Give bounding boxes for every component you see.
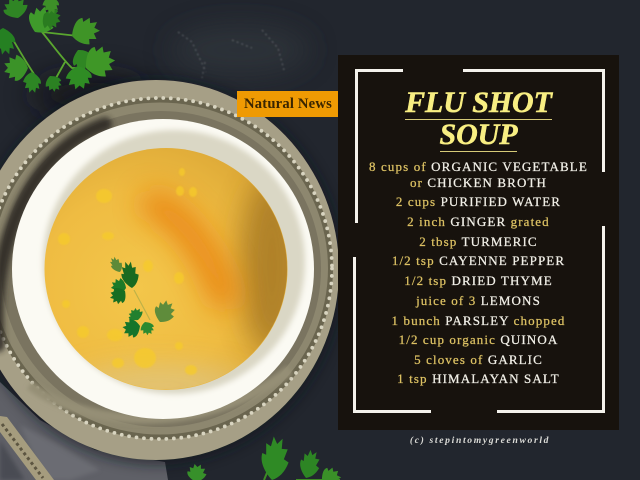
credit line: (c) stepintomygreenworld: [410, 435, 550, 446]
panel: recipe: 1/2 tsp CAYENNE PEPPER: [392, 253, 565, 268]
panel: recipe: 8 cups of ORGANIC VEGETABLE: [369, 159, 588, 174]
title: FLU SHOT: [405, 86, 552, 119]
beaded ring: [0, 98, 333, 440]
spoon handle: [0, 416, 54, 480]
title: [404, 86, 554, 152]
title: SOUP: [440, 118, 517, 151]
panel: recipe: 1/2 tsp DRIED THYME: [404, 273, 553, 288]
icon: parsley sprig top left: [0, 0, 121, 95]
bowl: [12, 119, 314, 419]
panel: recipe: 2 inch GINGER grated: [407, 214, 550, 229]
panel: recipe: juice of 3 LEMONS: [416, 293, 541, 308]
icon: parsley sprig bottom centre: [187, 464, 206, 480]
panel: recipe: 1 bunch PARSLEY chopped: [392, 313, 565, 328]
frame: top-left bracket: [355, 69, 403, 223]
icon: parsley sprig bottom right: [260, 436, 345, 480]
plate: [0, 79, 343, 465]
panel: recipe: 2 cups PURIFIED WATER: [396, 194, 561, 209]
frame: bottom-left bracket: [353, 257, 431, 413]
panel: recipe: [338, 55, 619, 430]
panel: recipe: 1 tsp HIMALAYAN SALT: [397, 371, 560, 386]
napkin: [0, 382, 168, 480]
frame: top-right bracket: [463, 69, 605, 172]
food photo background: [0, 0, 341, 480]
panel: recipe: 2 tbsp TURMERIC: [419, 234, 538, 249]
ingredient list: [369, 159, 588, 386]
soup: [44, 148, 288, 390]
icon: parsley garnish in soup: [106, 255, 178, 340]
frame: bottom-right bracket: [497, 226, 605, 413]
badge: Natural News: [237, 91, 339, 117]
panel: recipe: or CHICKEN BROTH: [410, 175, 547, 190]
panel: recipe: 5 cloves of GARLIC: [414, 352, 543, 367]
badge: Natural News: Natural News: [244, 96, 332, 112]
panel: recipe: 1/2 cup organic QUINOA: [399, 332, 558, 347]
